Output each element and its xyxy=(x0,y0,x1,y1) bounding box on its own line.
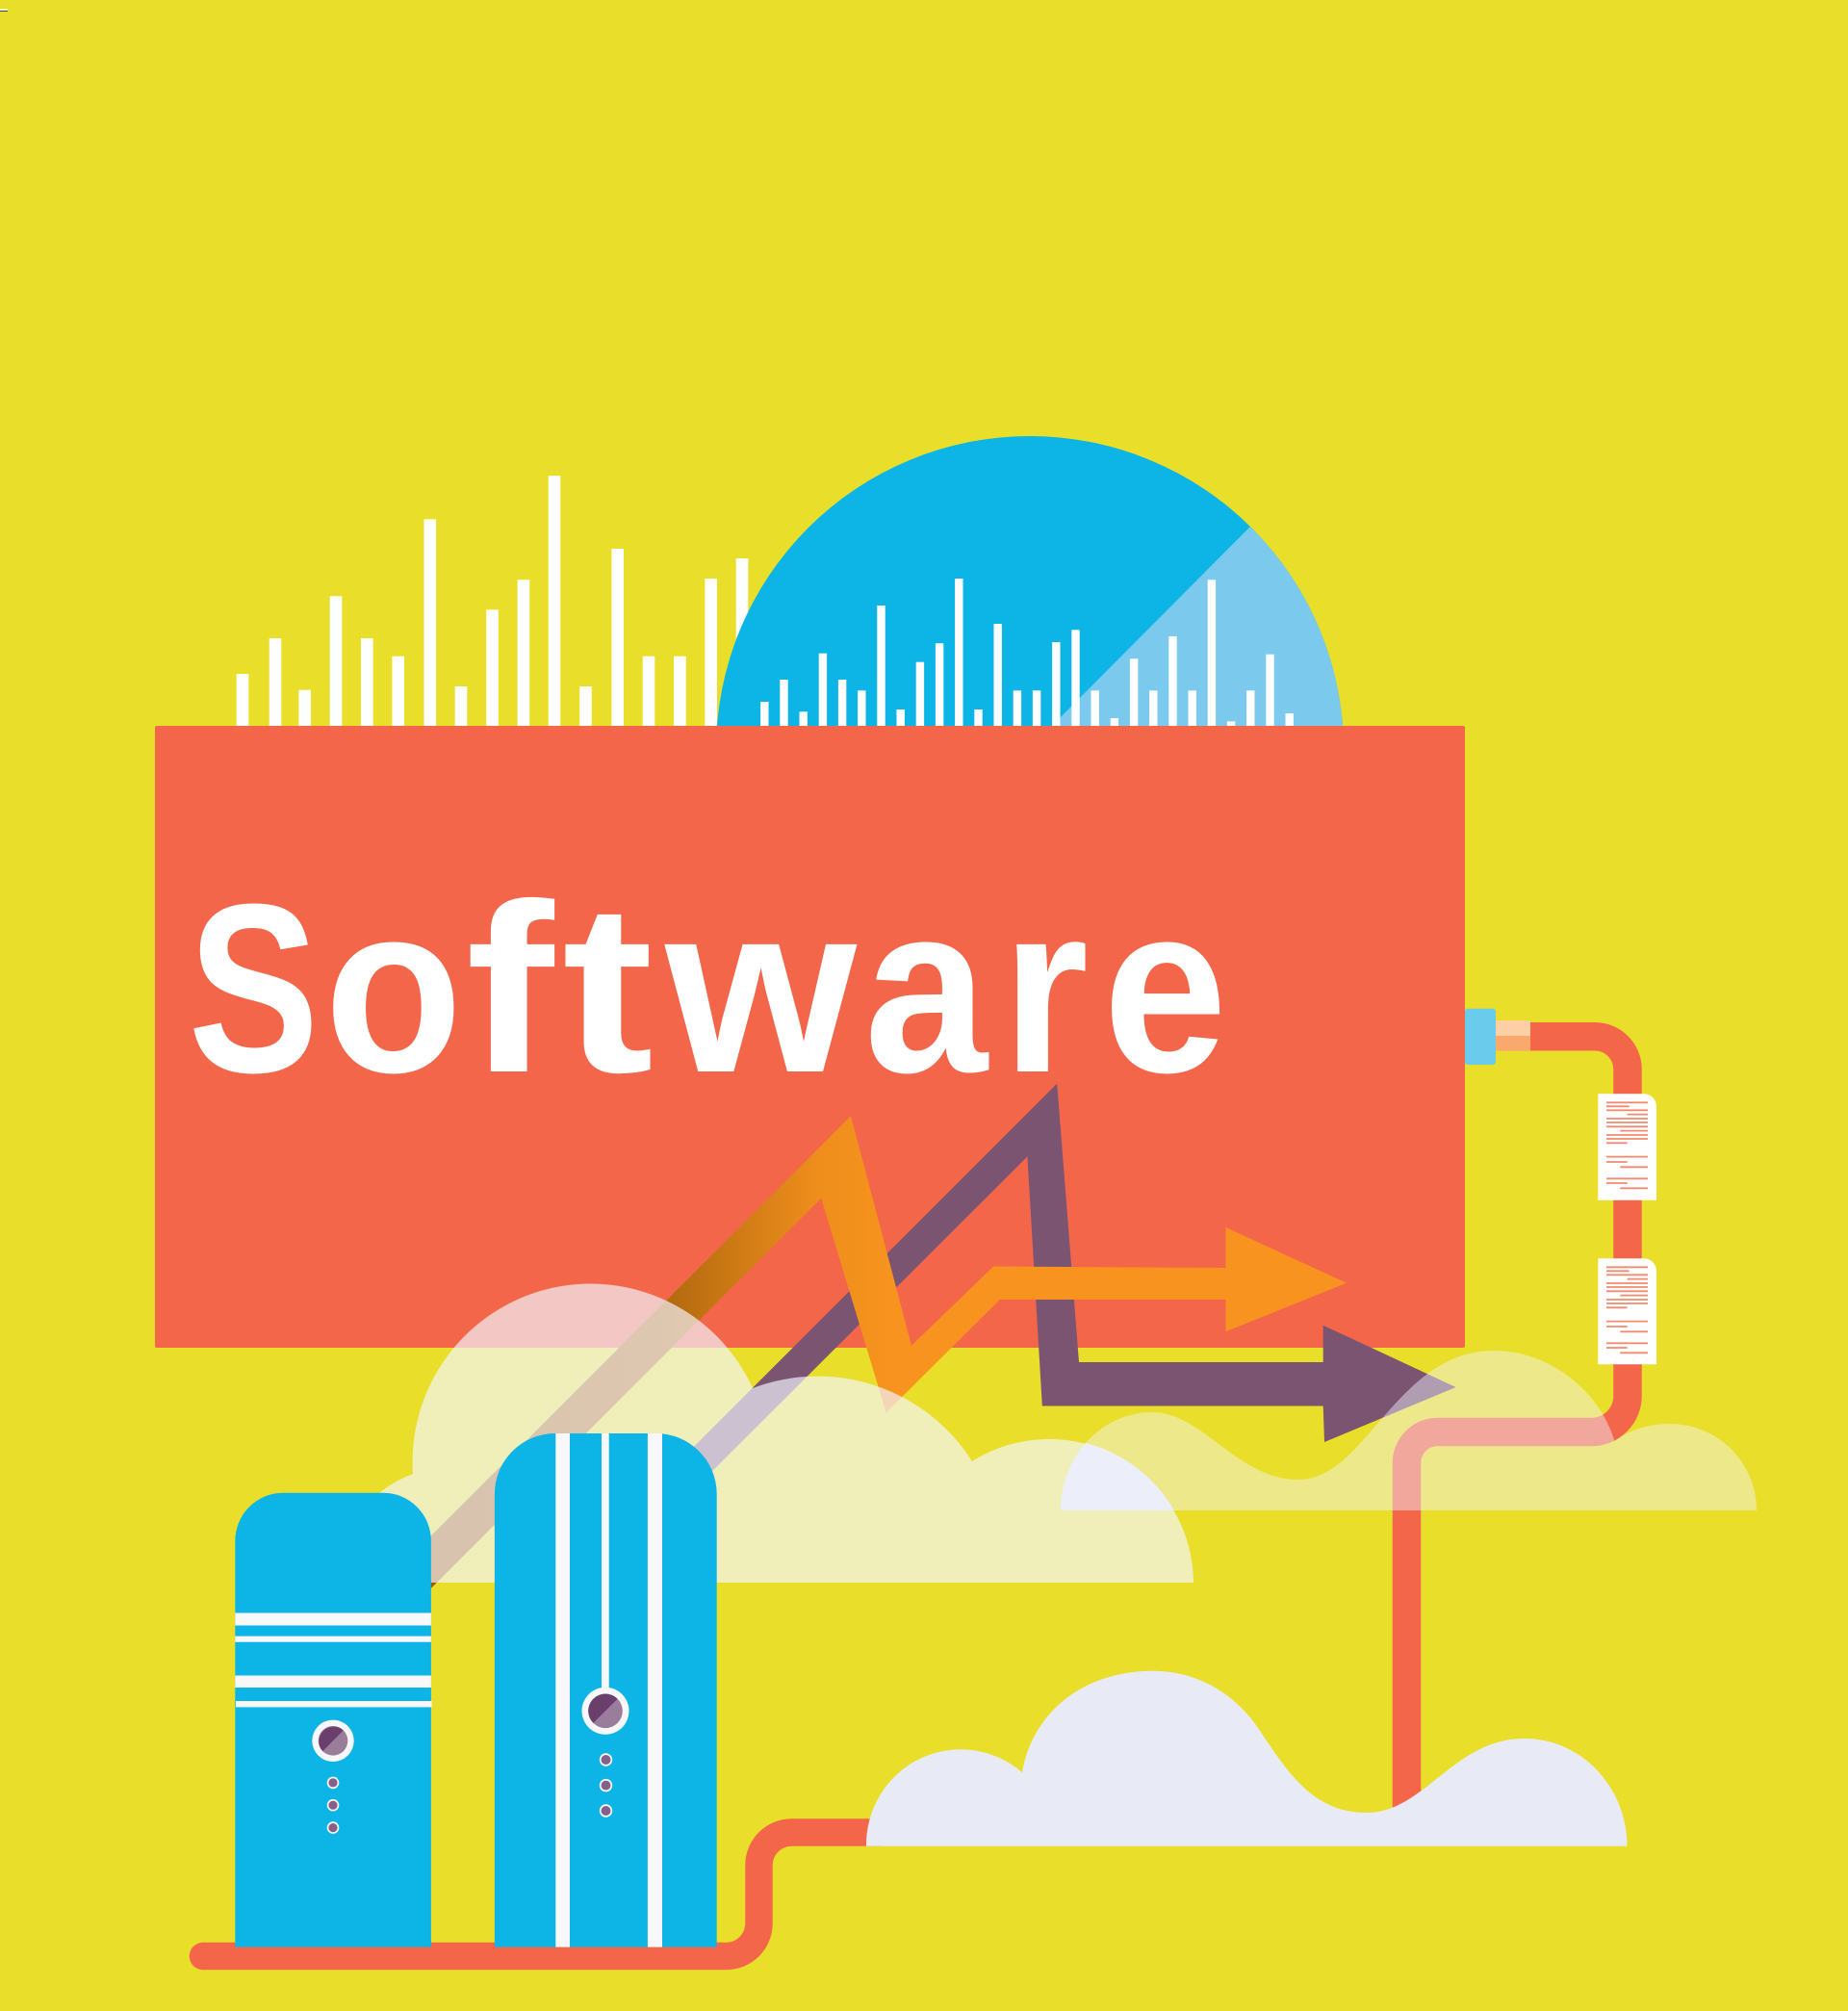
bar chart: large white bars xyxy=(237,476,748,732)
indicator lights: left tower xyxy=(327,1777,339,1834)
power button: left tower xyxy=(312,1720,354,1762)
pipe: connector to cloud xyxy=(1407,1037,1628,1815)
arrow: purple trend xyxy=(578,1084,1456,1606)
title: Software: r xyxy=(1002,854,1089,1122)
document icon: lower xyxy=(1598,1258,1656,1364)
server: right tower xyxy=(495,1433,717,1947)
indicator lights: right tower xyxy=(600,1753,612,1818)
title: Software: a xyxy=(864,854,989,1122)
corner mark xyxy=(0,10,8,12)
bar chart: small white bars on dial xyxy=(760,579,1294,732)
power button: right tower xyxy=(581,1688,629,1735)
title: Software: o xyxy=(324,854,463,1122)
cloud: translucent centre xyxy=(337,1284,1194,1583)
red title panel xyxy=(155,726,1465,1348)
cloud: translucent right xyxy=(1061,1351,1757,1510)
title: Software: t xyxy=(562,854,654,1122)
title: Software: f xyxy=(466,854,554,1122)
title: Software: S xyxy=(188,854,319,1122)
server: left tower xyxy=(235,1493,432,1947)
document icon: upper xyxy=(1598,1094,1656,1200)
arrow: orange trend xyxy=(414,1116,1347,1606)
title: Software: e xyxy=(1103,854,1227,1122)
pipe connector: blue plug xyxy=(1465,1009,1530,1065)
blue dial semicircle xyxy=(717,436,1344,726)
cloud overlap highlight xyxy=(1061,1443,1174,1510)
pipe: cloud to servers xyxy=(203,1833,881,1956)
cloud: solid bottom xyxy=(866,1671,1627,1846)
title: Software: w xyxy=(664,854,858,1122)
